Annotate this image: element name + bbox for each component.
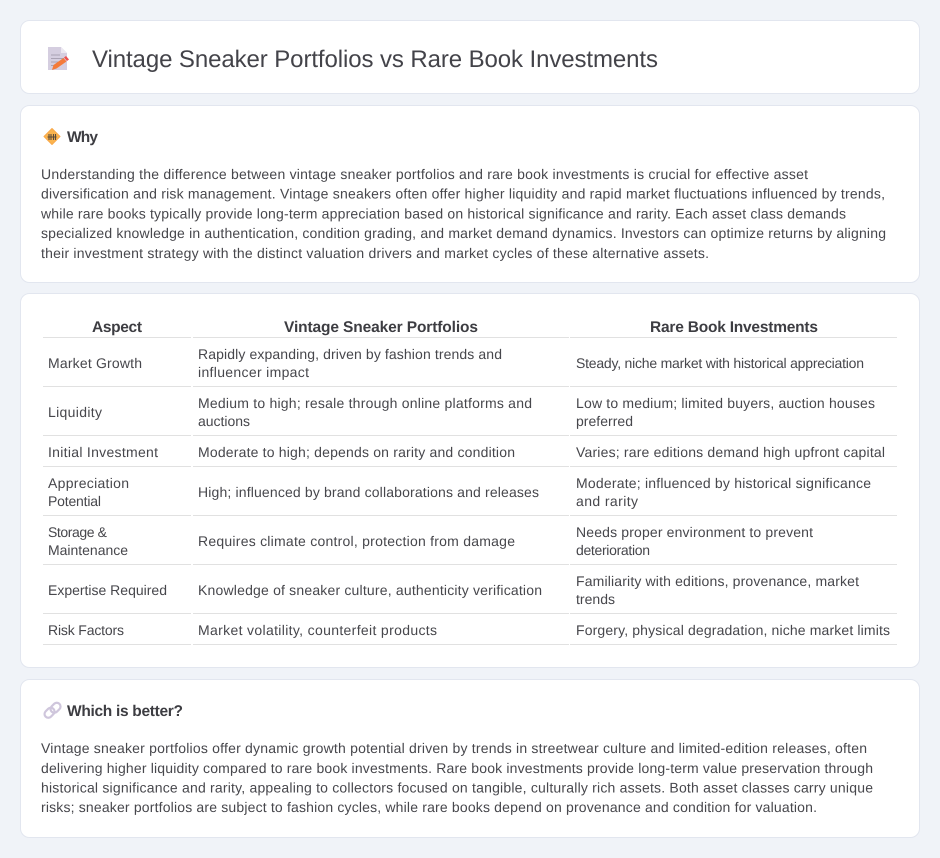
panel: why: [20, 106, 920, 282]
table row: risk factors: [48, 622, 890, 638]
title: Vintage Sneaker Portfolios vs Rare Book Investments: [92, 46, 658, 73]
table row: market growth: Steady, niche market with historical appreciation: [576, 355, 864, 371]
icon: diamond warning sign: [44, 128, 60, 144]
table row: risk factors: Risk Factors: [48, 622, 124, 638]
text block: why paragraph: specialized knowledge in authentication, condition grading, and market demand dynamics. Investors can optimize returns by aligning: [41, 225, 886, 241]
table row: appreciation potential: and rarity: [576, 493, 638, 509]
table row: liquidity: Medium to high; resale through online platforms and: [198, 395, 532, 411]
panel: which is better: [20, 680, 920, 838]
panel: title header: [20, 20, 920, 94]
text block: why paragraph: Understanding the difference between vintage sneaker portfolios and rare book investments is crucial for effective asset: [41, 166, 808, 182]
text block: which is better paragraph: Vintage sneaker portfolios offer dynamic growth potential driven by trends in streetwear culture and limited-edition releases, often: [41, 740, 867, 756]
text block: which is better paragraph: risks; sneaker portfolios are subject to fashion cycles, while rare books depend on provenance and condition for valuation.: [41, 799, 817, 815]
table header row: Vintage Sneaker Portfolios: [284, 319, 478, 336]
table row: appreciation potential: Moderate; influenced by historical significance: [576, 475, 871, 491]
table row: initial investment: Varies; rare editions demand high upfront capital: [576, 444, 885, 460]
table row: liquidity: [48, 395, 875, 429]
table row: expertise required: [48, 573, 859, 607]
panel: comparison table: [20, 294, 920, 668]
table row: expertise required: Familiarity with editions, provenance, market: [576, 573, 859, 589]
table row: expertise required: trends: [576, 591, 615, 607]
text block: why paragraph: diversification and risk management. Vintage sneakers often offer higher liquidity and rapid market fluctuations influenced by trends,: [41, 186, 885, 202]
table row: appreciation potential: High; influenced by brand collaborations and releases: [198, 484, 539, 500]
icon: chain link: [43, 701, 62, 719]
text block: which is better paragraph: historical significance and rarity, appealing to collectors focused on tangible, culturally rich assets. Both asset classes carry unique: [41, 780, 873, 796]
table row: storage and maintenance: Requires climate control, protection from damage: [198, 533, 515, 549]
table row: market growth: influencer impact: [198, 364, 309, 380]
table header row: Rare Book Investments: [650, 319, 818, 336]
table row: storage and maintenance: Storage &: [48, 524, 108, 540]
table row: initial investment: Initial Investment: [48, 444, 158, 460]
table row: storage and maintenance: deterioration: [576, 542, 650, 558]
table row: storage and maintenance: [48, 524, 813, 558]
heading: why: Why: [67, 129, 98, 146]
table row: appreciation potential: Appreciation: [48, 475, 129, 491]
text block: why paragraph: their investment strategy with the distinct valuation drivers and market cycles of these alternative assets.: [41, 245, 709, 261]
text block: which is better paragraph: [41, 740, 873, 815]
icon: document with pencil: [48, 47, 69, 70]
table header row: [92, 319, 818, 336]
table row: market growth: [48, 346, 864, 380]
text block: why paragraph: [40, 166, 886, 261]
table row: market growth: Rapidly expanding, driven by fashion trends and: [198, 346, 502, 362]
table row: storage and maintenance: Maintenance: [48, 542, 128, 558]
text block: why paragraph: while rare books typically provide long-term appreciation based on historical significance and rarity. Each asset class demands: [40, 206, 846, 222]
table row: storage and maintenance: Needs proper environment to prevent: [576, 524, 813, 540]
text block: which is better paragraph: delivering higher liquidity compared to rare book investments. Rare book investments provide long-term value preservation through: [41, 760, 873, 776]
table row: initial investment: Moderate to high; depends on rarity and condition: [198, 444, 515, 460]
table row: liquidity: auctions: [198, 413, 250, 429]
table row: appreciation potential: [48, 475, 871, 509]
table row: liquidity: Low to medium; limited buyers, auction houses: [576, 395, 875, 411]
table row: risk factors: Forgery, physical degradation, niche market limits: [576, 622, 890, 638]
heading: which is better: Which is better?: [67, 703, 183, 720]
table row: liquidity: Liquidity: [48, 404, 102, 420]
table row: expertise required: Knowledge of sneaker culture, authenticity verification: [198, 582, 542, 598]
table header row: Aspect: [92, 319, 142, 336]
table row: risk factors: Market volatility, counterfeit products: [198, 622, 437, 638]
table row: appreciation potential: Potential: [48, 493, 101, 509]
table row: market growth: Market Growth: [48, 355, 142, 371]
table row: expertise required: Expertise Required: [48, 582, 167, 598]
table row: liquidity: preferred: [576, 413, 633, 429]
table row: initial investment: [48, 444, 885, 460]
